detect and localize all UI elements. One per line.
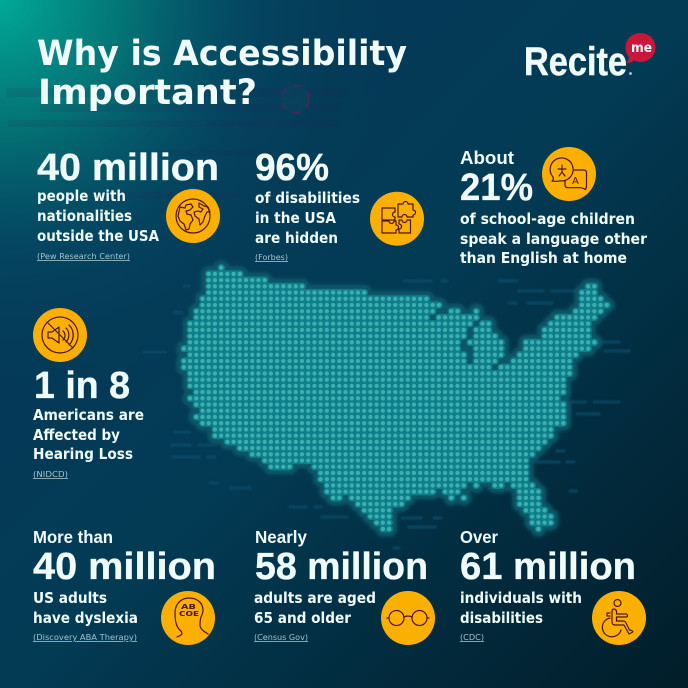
icon: muted speaker xyxy=(33,308,87,362)
stat: 58 million aged xyxy=(254,527,428,642)
stat: 58 million aged: 58 million xyxy=(255,546,428,588)
icon: speech bubbles xyxy=(542,147,596,201)
stat: 40 million dyslexia: More than xyxy=(33,527,113,547)
stat: 40 million dyslexia: US adults xyxy=(33,589,107,607)
stat: 61 million disabilities: 61 million xyxy=(460,546,636,588)
icon: head with letters: COE xyxy=(179,610,199,618)
stat: 61 million disabilities: disabilities xyxy=(460,609,543,627)
stat: 21% language: speak a language other xyxy=(460,230,648,248)
stat: 21% language: of school-age children xyxy=(460,210,635,228)
stat: 40 million nationalities: (Pew Research Center) xyxy=(37,252,130,261)
stat: 21% language: than English at home xyxy=(460,249,627,267)
stat: 58 million aged: (Census Gov) xyxy=(254,633,308,642)
stat: 1 in 8 hearing xyxy=(33,365,144,479)
icon: wheelchair xyxy=(592,591,646,645)
icon: speech bubbles: A xyxy=(572,176,579,187)
stat: 40 million nationalities: people with xyxy=(37,187,126,205)
stat: 40 million dyslexia xyxy=(33,527,216,642)
stat: 96% hidden: (Forbes) xyxy=(255,253,288,262)
stat: 40 million nationalities: 40 million xyxy=(37,147,219,189)
stat: 61 million disabilities: Over xyxy=(460,527,498,547)
stat: 40 million dyslexia: 40 million xyxy=(33,546,216,588)
stat: 96% hidden xyxy=(255,147,360,262)
decorative dashes around the map xyxy=(144,281,629,548)
stat: 96% hidden: 96% xyxy=(255,147,329,189)
stat: 61 million disabilities: individuals with xyxy=(460,589,582,607)
stat: 1 in 8 hearing: Hearing Loss xyxy=(33,445,133,463)
icon: globe xyxy=(166,189,220,243)
title: Why is Accessibility xyxy=(37,34,407,74)
stat: 40 million dyslexia: (Discovery ABA Therapy) xyxy=(33,633,137,642)
ghost artefact behind heading xyxy=(6,88,346,199)
stat: 21% language xyxy=(460,147,648,267)
logo: Recite Me: Recite xyxy=(524,40,627,84)
icon: glasses xyxy=(381,591,435,645)
stat: 21% language: About xyxy=(460,147,514,168)
title xyxy=(37,34,407,113)
stat: 40 million dyslexia: have dyslexia xyxy=(33,609,138,627)
icon: puzzle xyxy=(370,192,424,246)
stat: 58 million aged: 65 and older xyxy=(254,609,352,627)
stat: 1 in 8 hearing: Americans are xyxy=(33,406,144,424)
stat: 21% language: 21% xyxy=(460,167,533,209)
stat: 40 million nationalities xyxy=(37,147,219,261)
stat: 58 million aged: Nearly xyxy=(255,527,307,547)
ghost logo ring xyxy=(281,85,309,113)
stat: 61 million disabilities: (CDC) xyxy=(460,633,484,642)
stat: 1 in 8 hearing: Affected by xyxy=(33,426,120,444)
title: Important? xyxy=(38,73,257,113)
stat: 61 million disabilities xyxy=(460,527,636,642)
logo: Recite Me: me xyxy=(631,40,652,56)
stat: 40 million nationalities: outside the USA xyxy=(37,227,159,245)
stat: 1 in 8 hearing: 1 in 8 xyxy=(34,365,130,407)
icon: head with letters xyxy=(161,591,215,645)
stat: 1 in 8 hearing: (NIDCD) xyxy=(33,470,68,479)
stat: 40 million nationalities: nationalities xyxy=(37,207,132,225)
stat: 58 million aged: adults are aged xyxy=(254,589,376,607)
stat: 96% hidden: of disabilities xyxy=(255,189,360,207)
icon: head with letters: AB xyxy=(181,603,196,611)
US dot map xyxy=(184,268,607,529)
stat: 96% hidden: are hidden xyxy=(255,229,338,247)
stat: 96% hidden: in the USA xyxy=(255,209,336,227)
